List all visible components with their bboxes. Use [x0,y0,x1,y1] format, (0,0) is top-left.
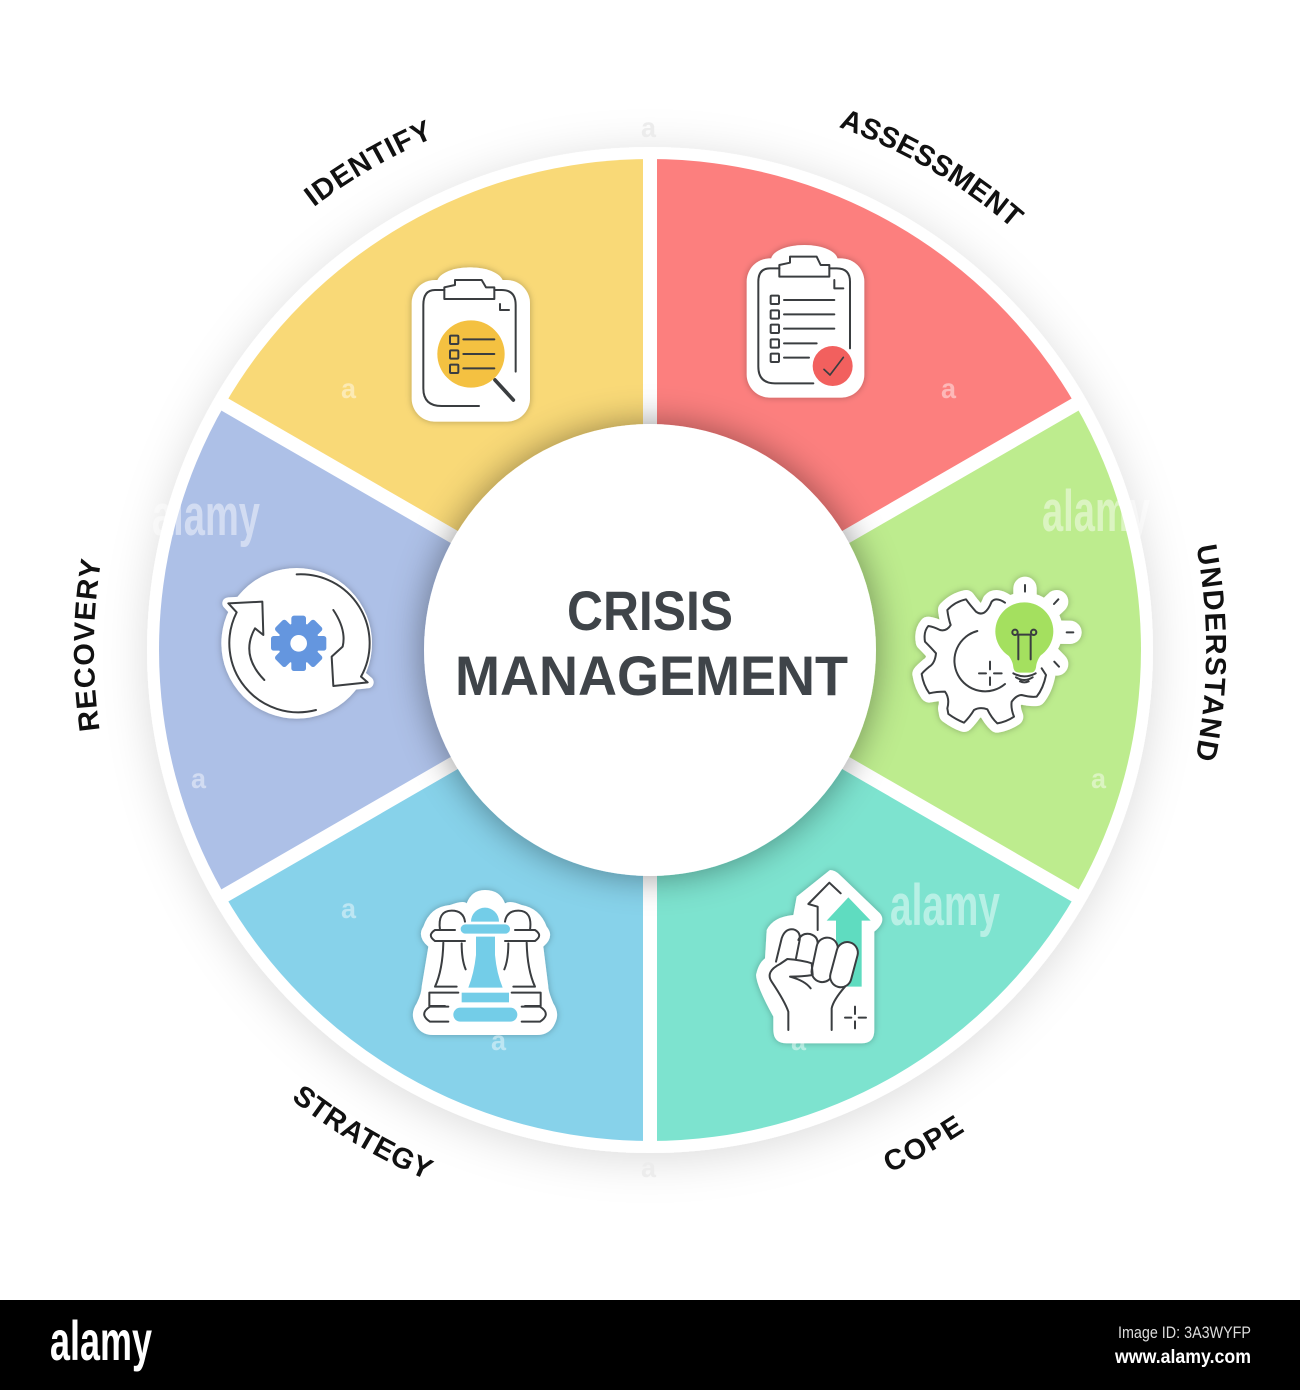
panel: identify segment [225,159,650,650]
watermarks: a [791,1025,806,1056]
icon: checklist clipboard (assessment) [747,245,864,398]
icon: fist with arrow (cope) [756,870,882,1043]
footer url: www.alamy.com [1114,1347,1251,1368]
watermarks: a [941,373,956,404]
watermarks: a [1091,763,1106,794]
watermarks: a [491,1025,506,1056]
watermarks: a [341,373,356,404]
panel: strategy segment [225,650,650,1141]
title: MANAGEMENT [455,644,848,707]
panel: cope segment [650,650,1075,1141]
footer bar [0,1300,1300,1390]
outer white ring [147,147,1153,1153]
footer logo: alamy [50,1309,152,1372]
segmented wheel [159,150,1141,1150]
label: cope: COPE [884,1115,964,1170]
watermarks: a [641,112,656,143]
panel: recovery segment [159,404,650,896]
title: CRISIS [567,579,733,642]
watermarks [152,112,1150,1183]
label: understand: UNDERSTAND [1197,544,1226,760]
label: identify: IDENTIFY [303,120,427,206]
panel: understand segment [650,404,1141,896]
watermarks: alamy [152,483,260,548]
watermarks: a [341,893,356,924]
icon: chess pieces (strategy) [413,890,557,1035]
watermarks: alamy [890,873,1000,938]
watermarks: alamy [1042,479,1150,544]
panel: assessment segment [650,159,1075,650]
watermarks: a [191,763,206,794]
icon: gear and light bulb (understand) [922,585,1073,723]
title [455,579,848,707]
center circle [424,424,876,876]
label: assessment: ASSESSMENT [839,111,1025,224]
label: recovery: RECOVERY [74,558,100,731]
icon: gear with cycle arrows (recovery) [227,574,370,713]
label: strategy: STRATEGY [294,1086,434,1177]
footer image id: Image ID: 3A3WYFP [1118,1323,1251,1342]
watermarks: a [641,1152,656,1183]
icon: clipboard with magnifier (identify) [412,267,530,422]
